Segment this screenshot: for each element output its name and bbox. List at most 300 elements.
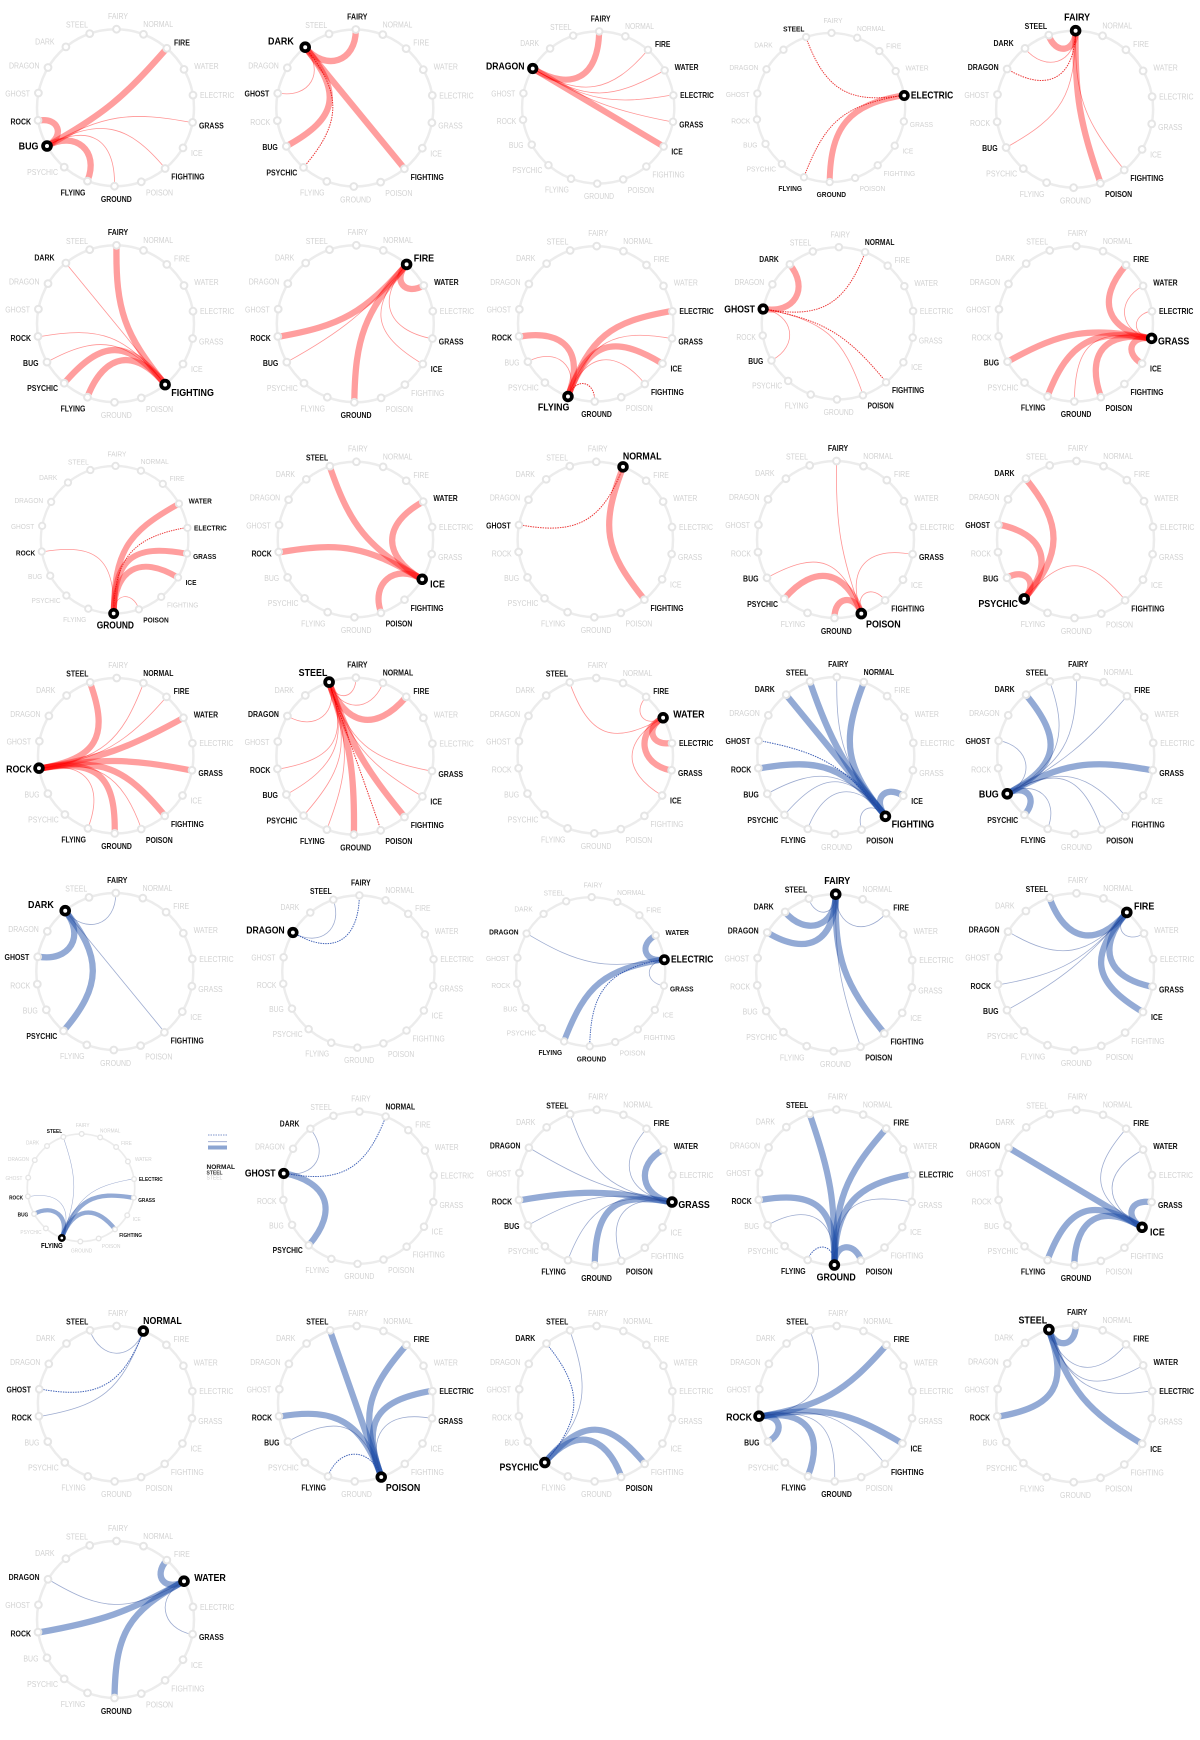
labels: PSYCHIC	[499, 1462, 539, 1474]
labels: ELECTRIC	[919, 1387, 954, 1396]
labels: GHOST	[724, 304, 755, 316]
labels: DARK	[36, 685, 55, 695]
labels: GROUND	[340, 195, 372, 204]
labels: WATER	[1153, 278, 1178, 288]
selected node: FLYING	[59, 1235, 64, 1241]
arcs	[1007, 31, 1125, 183]
labels: NORMAL	[625, 22, 654, 31]
labels: STEEL	[1026, 452, 1048, 462]
labels: GHOST	[247, 1385, 271, 1395]
labels: DRAGON	[729, 63, 758, 72]
labels: FAIRY	[588, 1092, 608, 1102]
labels: STEEL	[310, 886, 332, 896]
labels: POISON	[625, 835, 652, 845]
labels: GHOST	[11, 523, 35, 531]
labels: ELECTRIC	[439, 91, 474, 100]
labels: WATER	[673, 709, 705, 721]
labels: STEEL	[786, 1101, 809, 1110]
labels: ICE	[430, 149, 442, 158]
labels: WATER	[1154, 493, 1179, 503]
labels: FAIRY	[828, 1092, 848, 1102]
labels: ELECTRIC	[679, 522, 714, 532]
labels: BUG	[504, 1438, 520, 1447]
labels	[965, 876, 1195, 1068]
labels: FAIRY	[108, 450, 127, 458]
labels: FAIRY	[588, 444, 608, 454]
labels: NORMAL	[143, 883, 172, 893]
selected node: WATER	[659, 714, 667, 722]
chart: GRASS red	[966, 228, 1194, 419]
labels: NORMAL	[1102, 1315, 1132, 1325]
labels	[966, 228, 1194, 419]
labels: FIGHTING	[413, 1250, 445, 1260]
labels: PSYCHIC	[747, 815, 779, 825]
labels: POISON	[867, 401, 894, 411]
labels: GRASS	[438, 1417, 463, 1426]
labels: ROCK	[972, 1197, 992, 1206]
labels: ICE	[191, 365, 203, 374]
labels: FLYING	[780, 1053, 805, 1063]
labels: FIRE	[893, 903, 909, 913]
labels: ICE	[1150, 1227, 1165, 1239]
labels: PSYCHIC	[27, 167, 58, 177]
labels: BUG	[23, 1006, 38, 1016]
labels: FIRE	[894, 1334, 909, 1344]
labels: ROCK	[970, 1413, 991, 1423]
labels: WATER	[914, 1358, 938, 1368]
chart: ROCK blue	[726, 1308, 954, 1499]
labels	[486, 1308, 714, 1499]
selected node: GRASS	[668, 1198, 676, 1206]
labels: NORMAL	[141, 457, 169, 466]
labels: POISON	[146, 1700, 173, 1710]
arcs	[519, 311, 672, 401]
labels: NORMAL	[385, 886, 414, 895]
labels: BUG	[748, 356, 763, 366]
labels: FLYING	[305, 1265, 329, 1275]
labels: GRASS	[439, 984, 463, 994]
labels: PSYCHIC	[986, 1463, 1018, 1473]
labels: WATER	[194, 61, 219, 71]
labels: GHOST	[5, 305, 30, 315]
arcs	[278, 30, 405, 169]
labels: POISON	[626, 403, 653, 413]
labels: ELECTRIC	[1159, 1386, 1194, 1396]
labels: WATER	[1153, 63, 1178, 73]
labels: POISON	[386, 404, 413, 414]
labels: ROCK	[11, 1629, 31, 1639]
labels: FLYING	[1020, 1484, 1045, 1494]
labels: STEEL	[1025, 22, 1047, 31]
labels: DARK	[268, 36, 294, 48]
labels: DARK	[36, 1333, 55, 1343]
labels: GRASS	[439, 337, 464, 347]
labels: FIRE	[653, 686, 669, 696]
selected node: ELECTRIC	[901, 92, 908, 99]
labels: ELECTRIC	[679, 1387, 714, 1396]
selected node: BUG	[43, 142, 51, 150]
labels: ROCK	[730, 982, 750, 992]
labels: ELECTRIC	[440, 1171, 474, 1180]
labels	[246, 444, 474, 635]
labels: BUG	[264, 1438, 280, 1447]
labels: GHOST	[966, 1169, 991, 1178]
chart: NORMAL red	[486, 444, 714, 635]
labels: DARK	[35, 37, 54, 47]
labels	[724, 230, 954, 417]
labels: DARK	[516, 1117, 535, 1127]
labels: DARK	[994, 1333, 1014, 1343]
labels: POISON	[866, 1267, 892, 1277]
labels: GROUND	[1060, 196, 1091, 206]
labels: ICE	[911, 363, 922, 372]
labels: GROUND	[824, 407, 854, 417]
arcs	[39, 682, 192, 833]
labels: STEEL	[783, 24, 805, 34]
labels: GROUND	[340, 843, 372, 853]
labels: WATER	[674, 278, 698, 288]
labels: PSYCHIC	[266, 168, 298, 177]
labels: STEEL	[546, 669, 568, 679]
labels: GRASS	[439, 1200, 463, 1210]
labels: DARK	[275, 253, 294, 263]
labels: WATER	[1154, 709, 1179, 719]
selected node: GRASS	[1148, 334, 1155, 342]
labels: POISON	[628, 185, 654, 195]
labels: STEEL	[790, 238, 811, 248]
labels: ROCK	[257, 1197, 277, 1206]
labels: POISON	[385, 188, 412, 198]
labels: POISON	[143, 616, 169, 625]
labels: ICE	[670, 364, 682, 374]
labels: GROUND	[341, 1490, 372, 1499]
labels: FAIRY	[107, 875, 127, 885]
labels: POISON	[386, 619, 412, 629]
legend: STEEL	[206, 1176, 223, 1182]
labels	[486, 880, 714, 1063]
labels: ELECTRIC	[679, 739, 714, 748]
labels: DRAGON	[735, 278, 764, 287]
labels: GRASS	[678, 1417, 702, 1426]
labels: PSYCHIC	[267, 384, 298, 393]
labels: WATER	[194, 925, 218, 935]
labels	[726, 16, 954, 199]
labels: NORMAL	[863, 884, 892, 894]
labels: ICE	[191, 1660, 203, 1670]
labels: WATER	[666, 927, 690, 937]
labels: GHOST	[965, 521, 990, 530]
labels: GHOST	[725, 521, 750, 530]
labels: WATER	[915, 709, 939, 719]
selected node: PSYCHIC	[1020, 595, 1028, 603]
labels: DRAGON	[248, 709, 279, 719]
selected node: PSYCHIC	[541, 1459, 549, 1466]
arcs	[39, 1330, 143, 1417]
labels: ELECTRIC	[920, 306, 954, 316]
labels: FAIRY	[588, 1308, 608, 1318]
labels: DRAGON	[248, 61, 279, 71]
labels: FIGHTING	[411, 388, 444, 398]
labels: POISON	[388, 1049, 414, 1059]
labels: PSYCHIC	[268, 1463, 299, 1472]
labels: FLYING	[781, 836, 806, 845]
labels: FLYING	[541, 1483, 566, 1493]
labels: GRASS	[438, 552, 462, 562]
labels: POISON	[866, 1483, 893, 1493]
labels: GRASS	[670, 984, 694, 994]
labels: POISON	[386, 1482, 420, 1494]
labels: FLYING	[539, 1047, 562, 1057]
labels: PSYCHIC	[266, 816, 298, 826]
labels: DRAGON	[250, 493, 280, 503]
labels: POISON	[1105, 190, 1132, 199]
labels: GHOST	[245, 737, 270, 747]
labels: POISON	[385, 837, 412, 846]
arcs	[999, 678, 1153, 830]
labels: NORMAL	[863, 451, 893, 461]
labels: PSYCHIC	[273, 1029, 303, 1039]
selected node: POISON	[857, 610, 865, 618]
labels: WATER	[1154, 926, 1179, 935]
legend: NORMAL	[206, 1164, 235, 1171]
selected node: BUG	[1003, 790, 1011, 798]
labels: ROCK	[6, 764, 32, 776]
labels: BUG	[262, 142, 278, 152]
labels: NORMAL	[1103, 1100, 1132, 1110]
labels: STEEL	[546, 1101, 569, 1110]
arcs	[759, 1114, 912, 1265]
labels: FLYING	[781, 1483, 806, 1493]
labels	[6, 1308, 234, 1499]
labels: BUG	[743, 140, 758, 150]
labels: FIGHTING	[1131, 820, 1165, 830]
labels: STEEL	[66, 20, 88, 30]
labels: FIRE	[174, 1334, 189, 1344]
labels: GROUND	[820, 1059, 851, 1069]
labels: GROUND	[581, 410, 612, 419]
labels: ICE	[902, 146, 914, 156]
labels: GROUND	[1061, 626, 1092, 636]
labels: ROCK	[11, 117, 31, 127]
labels: FAIRY	[828, 1308, 848, 1318]
labels	[726, 1092, 954, 1284]
chart: ICE red	[246, 444, 474, 635]
selected node: NORMAL	[139, 1327, 147, 1335]
labels: FIRE	[413, 470, 429, 480]
legend: STEEL	[206, 1170, 223, 1176]
labels: ELECTRIC	[200, 90, 235, 100]
chart: POISON red	[725, 443, 955, 636]
chart: STEEL red	[245, 660, 474, 853]
labels: DRAGON	[969, 1141, 1000, 1151]
labels: DARK	[516, 685, 535, 695]
labels: FIRE	[170, 475, 185, 483]
labels: FLYING	[541, 619, 566, 628]
labels: NORMAL	[1103, 667, 1133, 677]
labels: FIRE	[646, 905, 662, 915]
labels: ROCK	[731, 1197, 752, 1206]
labels: ICE	[1150, 364, 1162, 374]
labels: DARK	[754, 902, 774, 912]
labels: FAIRY	[108, 660, 128, 670]
labels	[965, 659, 1195, 852]
labels: ROCK	[970, 119, 990, 128]
labels: FIRE	[121, 1141, 132, 1147]
labels: NORMAL	[865, 237, 895, 247]
labels: NORMAL	[623, 1316, 653, 1326]
labels: FIRE	[894, 686, 910, 695]
labels: DARK	[514, 904, 533, 914]
labels: PSYCHIC	[26, 1031, 58, 1041]
labels: POISON	[865, 1053, 892, 1063]
labels	[5, 875, 234, 1068]
labels: ICE	[430, 1444, 442, 1454]
labels: FLYING	[541, 1267, 566, 1276]
labels: FLYING	[61, 404, 86, 414]
labels: ICE	[910, 1013, 922, 1023]
labels: FAIRY	[347, 660, 368, 670]
labels: NORMAL	[863, 1316, 893, 1326]
labels: WATER	[194, 1358, 218, 1368]
arcs	[768, 462, 912, 618]
chart: FAIRY blue	[724, 875, 954, 1069]
labels: FIRE	[1133, 255, 1149, 264]
labels: DRAGON	[9, 61, 40, 71]
labels: FIRE	[414, 253, 435, 265]
selected node: FIGHTING	[882, 812, 889, 820]
labels: BUG	[269, 1005, 284, 1014]
labels: POISON	[1106, 620, 1133, 630]
labels: DRAGON	[969, 493, 1000, 502]
labels: NORMAL	[1103, 451, 1133, 461]
labels: DRAGON	[970, 277, 1000, 287]
labels: ICE	[191, 148, 203, 158]
labels: GROUND	[101, 411, 132, 420]
labels: GRASS	[1159, 769, 1184, 778]
labels: WATER	[675, 62, 699, 72]
labels: DRAGON	[729, 709, 760, 718]
labels: PSYCHIC	[986, 169, 1018, 179]
labels: WATER	[913, 1141, 938, 1151]
chart: DARK blue	[5, 875, 234, 1068]
labels: NORMAL	[143, 668, 174, 678]
chart: GHOST red	[724, 230, 954, 417]
labels: GROUND	[101, 842, 132, 851]
arcs	[998, 898, 1152, 1012]
labels: FIGHTING	[1131, 388, 1164, 397]
labels: BUG	[262, 791, 278, 800]
labels: ELECTRIC	[1159, 307, 1194, 316]
labels: ELECTRIC	[919, 1170, 954, 1180]
labels: NORMAL	[383, 668, 414, 678]
labels: FLYING	[60, 1052, 85, 1061]
labels: FAIRY	[108, 1308, 128, 1318]
labels: GROUND	[581, 1273, 612, 1283]
labels: ELECTRIC	[440, 955, 474, 964]
labels: FAIRY	[76, 1123, 90, 1129]
labels: FLYING	[61, 835, 86, 845]
labels: POISON	[866, 619, 901, 631]
selected node: FIGHTING	[161, 381, 169, 388]
labels: DARK	[516, 469, 535, 479]
labels: FIRE	[174, 686, 189, 696]
labels: STEEL	[786, 452, 808, 462]
labels: DARK	[754, 40, 773, 50]
labels: FIGHTING	[651, 388, 684, 397]
labels: BUG	[984, 358, 999, 368]
labels: STEEL	[785, 885, 808, 895]
labels: PSYCHIC	[507, 1028, 536, 1038]
labels: FIGHTING	[891, 604, 925, 614]
labels: NORMAL	[1103, 236, 1132, 246]
labels	[5, 1123, 163, 1254]
labels: NORMAL	[383, 20, 412, 29]
arcs	[1008, 265, 1152, 401]
labels	[5, 1523, 235, 1716]
labels: DARK	[520, 39, 539, 48]
labels: ROCK	[971, 549, 991, 559]
chart: BUG red	[5, 11, 235, 204]
labels: POISON	[1105, 1267, 1132, 1277]
arcs	[38, 894, 165, 1032]
labels: PSYCHIC	[748, 1246, 779, 1256]
arcs	[284, 1117, 386, 1245]
labels: GRASS	[918, 1200, 942, 1210]
labels: FIRE	[654, 255, 669, 264]
labels	[245, 1094, 474, 1281]
labels: DRAGON	[728, 926, 759, 936]
arcs	[278, 678, 432, 834]
labels: FIGHTING	[1130, 1468, 1164, 1478]
labels: NORMAL	[864, 667, 894, 677]
labels: FLYING	[301, 1483, 326, 1493]
labels: ICE	[431, 365, 442, 374]
labels: GRASS	[678, 337, 703, 346]
labels: GHOST	[7, 737, 31, 747]
labels: PSYCHIC	[27, 1679, 58, 1689]
labels: ELECTRIC	[680, 91, 715, 100]
labels: GRASS	[193, 553, 217, 561]
labels: ELECTRIC	[911, 90, 954, 100]
labels: ELECTRIC	[439, 739, 474, 749]
labels: FIGHTING	[167, 601, 199, 610]
labels: BUG	[744, 1438, 760, 1447]
labels: PSYCHIC	[746, 1032, 778, 1042]
labels: STEEL	[310, 1103, 332, 1112]
labels: DRAGON	[490, 1357, 520, 1367]
labels: PSYCHIC	[987, 815, 1019, 825]
labels: GRASS	[678, 1199, 710, 1211]
labels: FAIRY	[348, 228, 368, 237]
labels: BUG	[983, 1438, 998, 1448]
labels: WATER	[189, 497, 213, 505]
labels: DARK	[755, 469, 774, 478]
labels: ELECTRIC	[439, 522, 474, 532]
labels: BUG	[263, 358, 278, 368]
arcs	[279, 466, 423, 613]
labels: FIGHTING	[644, 1033, 676, 1042]
labels: DRAGON	[255, 1142, 285, 1152]
labels: DARK	[35, 1549, 54, 1558]
arcs	[527, 934, 664, 1046]
labels: ICE	[911, 796, 923, 806]
labels: BUG	[24, 1438, 40, 1447]
labels: GHOST	[487, 305, 511, 315]
labels: GRASS	[919, 769, 944, 778]
labels: ROCK	[492, 1197, 513, 1206]
labels: PSYCHIC	[512, 165, 543, 175]
labels: NORMAL	[617, 887, 645, 897]
